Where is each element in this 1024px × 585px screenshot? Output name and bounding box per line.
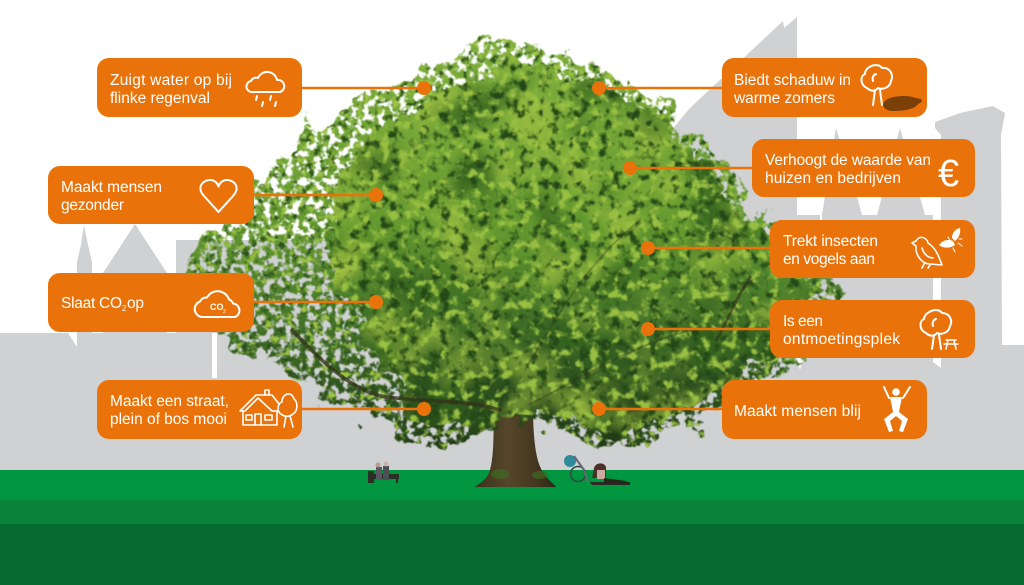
connector line and dot <box>252 295 383 309</box>
box <box>97 380 302 439</box>
connector line and dot <box>300 402 431 416</box>
callout: Maakt mensen gezonder <box>48 166 383 224</box>
moss at tree base <box>491 469 548 479</box>
box <box>722 380 927 439</box>
box <box>752 139 975 197</box>
bicycle with blue bag <box>564 455 588 482</box>
text: warme zomers <box>733 90 835 107</box>
people on a bench <box>368 462 399 483</box>
box <box>770 300 975 358</box>
text <box>733 72 851 107</box>
text: 2 <box>122 304 127 313</box>
text: Biedt schaduw in <box>734 72 851 89</box>
text: Is een <box>783 313 823 330</box>
connector line and dot <box>592 81 724 95</box>
text <box>765 152 931 187</box>
icon: CO2 cloud <box>195 291 239 317</box>
text: Maakt mensen <box>61 179 162 196</box>
text: op <box>127 295 144 312</box>
box <box>770 220 975 278</box>
person reading on the grass <box>590 463 630 485</box>
text: Trekt insecten <box>783 233 878 250</box>
icon: rain cloud <box>246 72 284 106</box>
icon: bird and insect <box>912 228 962 268</box>
text: gezonder <box>61 197 124 214</box>
text: Verhoogt de waarde van <box>765 152 931 169</box>
connector line and dot <box>300 81 431 95</box>
connector line and dot <box>592 402 724 416</box>
callout: Biedt schaduw in warme zomers <box>592 58 927 117</box>
tree branches <box>292 220 750 410</box>
icon: euro: € <box>938 153 959 195</box>
text: Maakt mensen blij <box>734 403 861 420</box>
text <box>783 313 900 348</box>
text: plein of bos mooi <box>110 411 227 428</box>
box <box>48 273 254 332</box>
skyline: grey city silhouette <box>0 17 1024 473</box>
text <box>783 233 878 268</box>
ground: layered green lawn <box>0 470 1024 585</box>
connector line and dot <box>641 241 772 255</box>
connector line and dot <box>641 322 772 336</box>
text <box>110 72 232 107</box>
icon: heart <box>200 180 237 212</box>
icon: tree with shadow <box>861 65 922 111</box>
box <box>48 166 254 224</box>
text: ontmoetingsplek <box>783 331 900 348</box>
tree crown outer <box>185 42 850 446</box>
tree trunk <box>475 405 556 487</box>
callout: Slaat CO2 op <box>48 273 383 332</box>
tree: chestnut with trunk and foliage crown <box>185 42 850 487</box>
text: Slaat CO <box>61 295 122 312</box>
connector line and dot <box>252 188 383 202</box>
text: Zuigt water op bij <box>110 72 232 89</box>
callout: Trekt insecten en vogels aan <box>641 220 975 278</box>
callout: Verhoogt de waarde van huizen en bedrijven <box>623 139 975 197</box>
tree crown core <box>332 62 815 432</box>
icon: house and tree <box>240 390 297 427</box>
text <box>61 179 162 214</box>
icon: CO2 cloud: 2 <box>223 309 226 315</box>
text: huizen en bedrijven <box>765 170 901 187</box>
text: en vogels aan <box>783 251 875 268</box>
box <box>722 58 927 117</box>
text: Maakt een straat, <box>110 393 229 410</box>
text <box>61 295 144 313</box>
callout: Is een ontmoetingsplek <box>641 300 975 358</box>
box <box>97 58 302 117</box>
connector line and dot <box>623 161 754 175</box>
icon: jumping person <box>884 387 910 432</box>
text <box>110 393 229 428</box>
callout: Maakt een straat, plein of bos mooi <box>97 380 431 439</box>
icon: CO2 cloud: CO <box>210 302 224 312</box>
icon: tree with picnic bench <box>920 310 958 349</box>
text: flinke regenval <box>110 90 210 107</box>
callout: Zuigt water op bij flinke regenval <box>97 58 431 117</box>
callout: Maakt mensen blij <box>592 380 927 439</box>
